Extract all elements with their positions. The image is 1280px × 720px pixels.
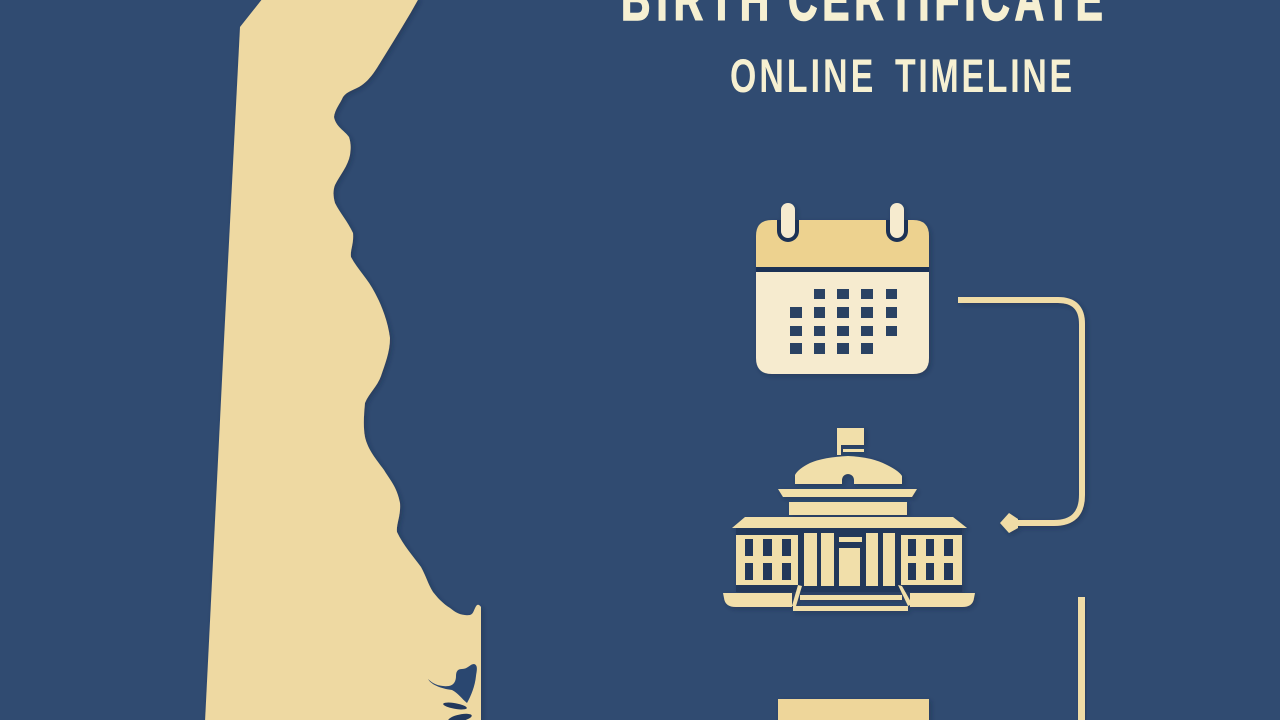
calendar day grid — [790, 289, 897, 354]
icon: calendar — [756, 203, 929, 374]
subtitle: TIMELINE — [895, 50, 1072, 102]
arrow: calendar to building — [958, 300, 1082, 533]
icon: government building — [723, 428, 975, 611]
icon: partial document — [778, 699, 929, 720]
subtitle: ONLINE — [730, 50, 873, 102]
calendar rings — [777, 203, 908, 242]
building cornice — [778, 489, 917, 497]
map inlet cutout — [428, 664, 477, 703]
building dome — [795, 456, 902, 484]
title — [621, 0, 1103, 33]
building shadow backing — [736, 528, 962, 592]
building left wing — [736, 535, 798, 585]
connector line to next step — [1078, 597, 1085, 720]
building right wing — [901, 535, 962, 585]
building roof — [732, 517, 967, 528]
building flag — [837, 428, 864, 455]
map small islands — [443, 701, 472, 720]
building base and steps — [723, 585, 975, 611]
map of Delaware — [205, 0, 481, 720]
building columns and door — [804, 533, 895, 586]
subtitle — [730, 50, 1072, 102]
